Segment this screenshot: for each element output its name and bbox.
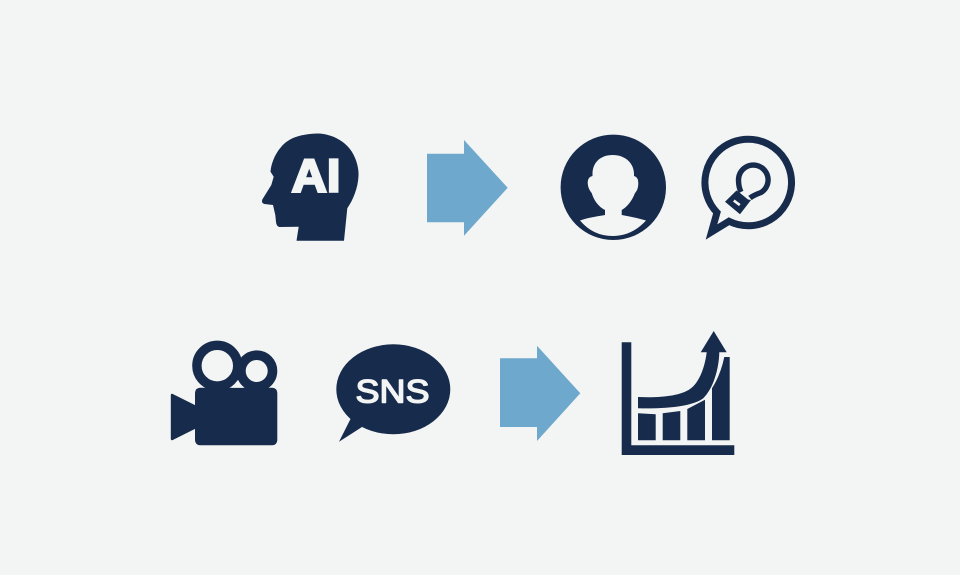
arrow: top: [427, 140, 508, 236]
icon: rising bar chart: [622, 331, 734, 455]
icon: AI head: [262, 134, 359, 241]
icon: SNS speech bubble: SNS: [356, 374, 430, 410]
icon: AI head: AI: [292, 150, 340, 202]
icon: lightbulb speech bubble: [705, 139, 792, 232]
arrow: bottom: [500, 346, 580, 441]
icon: SNS speech bubble: [336, 344, 450, 442]
icon: film camera: [172, 345, 277, 445]
icon: person in circle: [561, 135, 666, 240]
